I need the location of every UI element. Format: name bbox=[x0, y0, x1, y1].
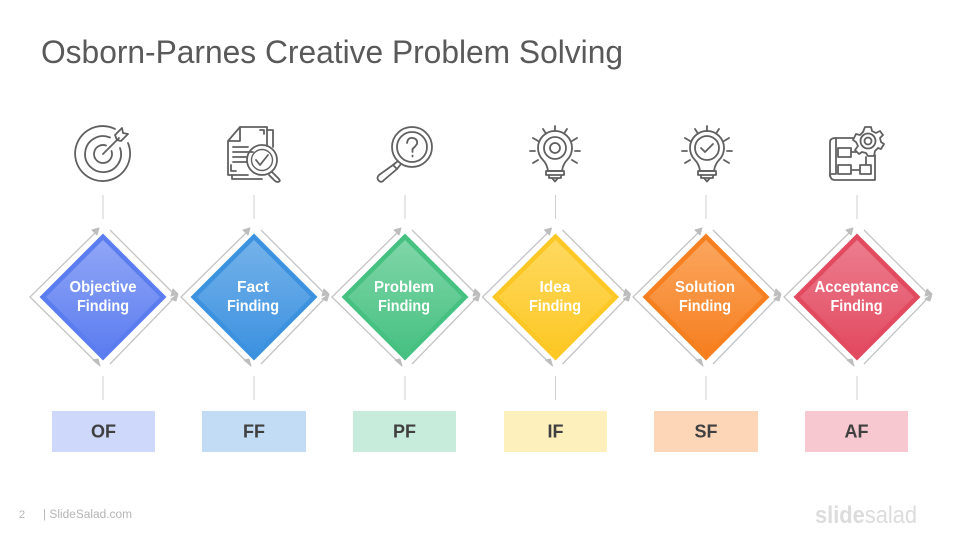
step 2: Fact Finding bbox=[181, 195, 329, 400]
footer site name: | SlideSalad.com bbox=[43, 509, 132, 521]
label box: SF: SF bbox=[694, 422, 718, 442]
step 3: Problem Finding bbox=[332, 195, 480, 400]
step 6: Acceptance Finding bbox=[784, 195, 932, 400]
step 5: Solution Finding bbox=[633, 195, 781, 400]
label box: OF: OF bbox=[91, 422, 116, 442]
icon: light bulb check bbox=[682, 126, 732, 182]
label box: AF: AF bbox=[844, 422, 868, 442]
label box: AF bbox=[805, 411, 908, 452]
icon: blueprint and gear bbox=[830, 127, 884, 180]
label box: FF: FF bbox=[243, 422, 265, 442]
title: Osborn-Parnes Creative Problem Solving bbox=[41, 34, 623, 70]
step 5: Solution Finding: Solution bbox=[675, 279, 735, 296]
step 1: Objective Finding bbox=[30, 195, 178, 400]
step 6: Acceptance Finding: Acceptance bbox=[814, 279, 899, 296]
brand logo wordmark: slidesalad bbox=[815, 502, 917, 529]
icon: document with magnifier bbox=[228, 127, 280, 182]
step 2: Fact Finding: Fact bbox=[237, 279, 270, 296]
icon: magnifier with question mark bbox=[378, 127, 432, 182]
step 3: Problem Finding: Problem bbox=[374, 279, 434, 296]
step 2: Fact Finding: Finding bbox=[227, 298, 279, 315]
label box: FF bbox=[202, 411, 306, 452]
step 1: Objective Finding: Finding bbox=[77, 298, 129, 315]
step 4: Idea Finding: Finding bbox=[529, 298, 581, 315]
label box: OF bbox=[52, 411, 155, 452]
step 3: Problem Finding: Finding bbox=[378, 298, 430, 315]
label box: IF bbox=[504, 411, 607, 452]
icon: target bbox=[75, 126, 130, 181]
label box: SF bbox=[654, 411, 758, 452]
label box: PF: PF bbox=[393, 422, 416, 442]
step 5: Solution Finding: Finding bbox=[679, 298, 731, 315]
step 6: Acceptance Finding: Finding bbox=[830, 298, 882, 315]
icon: light bulb idea bbox=[530, 126, 580, 182]
page number: 2 bbox=[19, 509, 25, 521]
step 1: Objective Finding: Objective bbox=[70, 279, 137, 296]
label box: IF: IF bbox=[548, 422, 564, 442]
step 4: Idea Finding: Idea bbox=[540, 279, 571, 296]
label box: PF bbox=[353, 411, 456, 452]
step 4: Idea Finding bbox=[482, 195, 630, 400]
